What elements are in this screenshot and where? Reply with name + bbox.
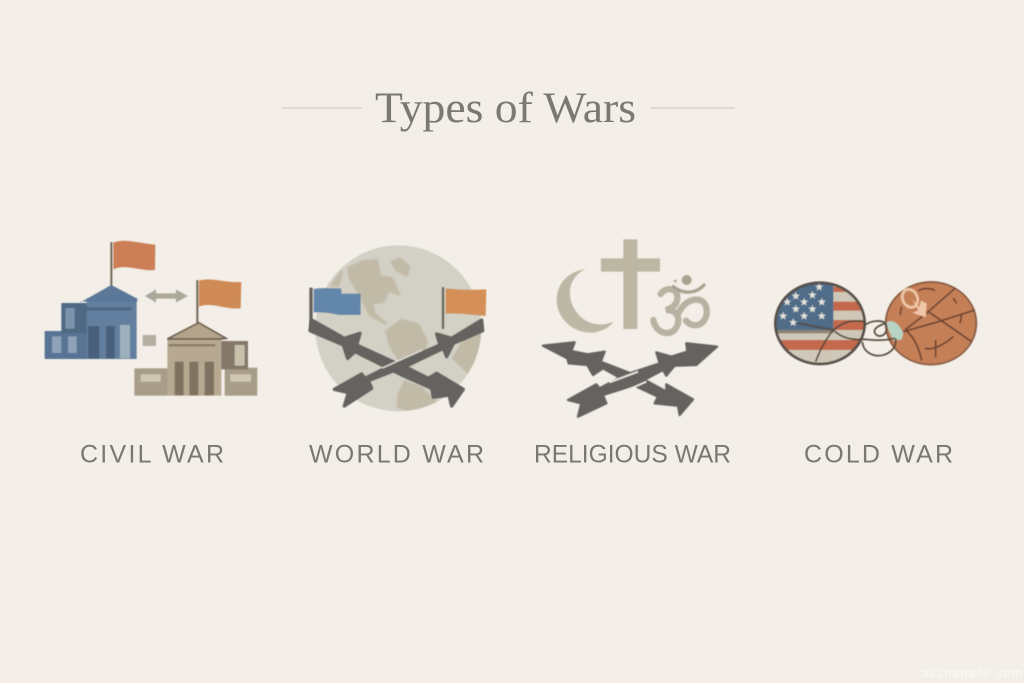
label: civil war: CIVIL WAR <box>80 440 224 468</box>
icon: two cracked globes joined: ★ <box>782 295 792 308</box>
panel: civil war <box>45 241 257 468</box>
icon: two buildings with flags <box>45 241 257 396</box>
icon: two cracked globes joined: ★ <box>808 302 817 315</box>
icon: two cracked globes joined: ★ <box>808 289 817 302</box>
icon: globe with flags and crossed arrows <box>310 245 486 411</box>
icon: two cracked globes joined: ★ <box>799 309 809 322</box>
icon: two cracked globes joined <box>773 280 976 367</box>
icon: two cracked globes joined: ★ <box>817 309 827 322</box>
icon: religious symbols and crossed arrows <box>543 239 717 417</box>
label: cold war: COLD WAR <box>804 440 953 468</box>
title: Types of Wars <box>375 85 636 132</box>
crossed arrows <box>543 342 717 417</box>
icon: two cracked globes joined: ★ <box>791 302 801 315</box>
icon: two cracked globes joined: ★ <box>817 295 827 308</box>
label: world war: WORLD WAR <box>309 440 484 468</box>
watermark: aczoapace.com <box>922 666 1022 680</box>
icon: two cracked globes joined: ★ <box>791 289 801 302</box>
label: religious war: RELIGIOUS WAR <box>534 440 731 468</box>
icon: two cracked globes joined: ★ <box>799 295 809 308</box>
icon: two cracked globes joined: ★ <box>788 316 798 329</box>
icon: two cracked globes joined: ★ <box>778 309 788 322</box>
panel: cold war <box>773 280 976 468</box>
crossed arrows on globe <box>310 320 483 406</box>
panel: religious war <box>534 239 731 468</box>
icon: two cracked globes joined: ★ <box>814 281 824 294</box>
panel: world war <box>309 245 486 468</box>
